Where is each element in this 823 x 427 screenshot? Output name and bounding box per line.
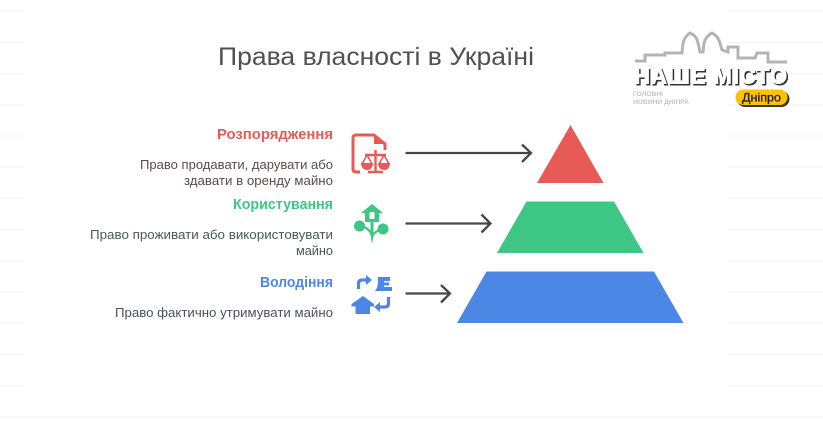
arrow: to bottom tier [406, 285, 450, 302]
title: Права власності в Україні [218, 43, 534, 71]
logo tagline second line: НОВИНИ ДНІПРА [633, 99, 689, 106]
pyramid tier: Користування [497, 202, 644, 253]
text: Розпорядження description: Право продавати, дарувати або [140, 157, 333, 172]
logo skyline [635, 33, 787, 62]
arrow: to middle tier [406, 214, 490, 232]
text: Користування description: Право проживати або використовувати [90, 227, 333, 242]
block: Володіння [115, 275, 333, 320]
block: Користування [90, 197, 333, 258]
icon: property exchange [352, 275, 392, 314]
pyramid tier: Розпорядження [537, 125, 604, 183]
logo badge [736, 90, 790, 107]
heading: Розпорядження: Розпорядження [217, 127, 333, 143]
logo: Наше Місто Дніпро [633, 33, 790, 107]
text: Користування description: майно [296, 243, 333, 258]
logo wordmark: НАШЕ МІСТО [636, 65, 788, 90]
text: Розпорядження description: здавати в оренду майно [184, 173, 333, 188]
icon: document with scales [353, 135, 390, 172]
block: Розпорядження [140, 127, 333, 188]
text: Володіння description: Право фактично утримувати майно [115, 305, 333, 320]
heading: Володіння: Володіння [260, 275, 333, 291]
heading: Користування: Користування [233, 197, 333, 213]
logo tagline: ГОЛОВНІ [633, 91, 663, 98]
icon: house on plant [354, 204, 388, 244]
pyramid [457, 125, 684, 323]
arrow: to top tier [406, 144, 531, 162]
logo wordmark: НАШЕ МІСТО [634, 64, 787, 88]
pyramid tier: Володіння [457, 272, 684, 323]
logo badge: Дніпро [742, 90, 781, 104]
